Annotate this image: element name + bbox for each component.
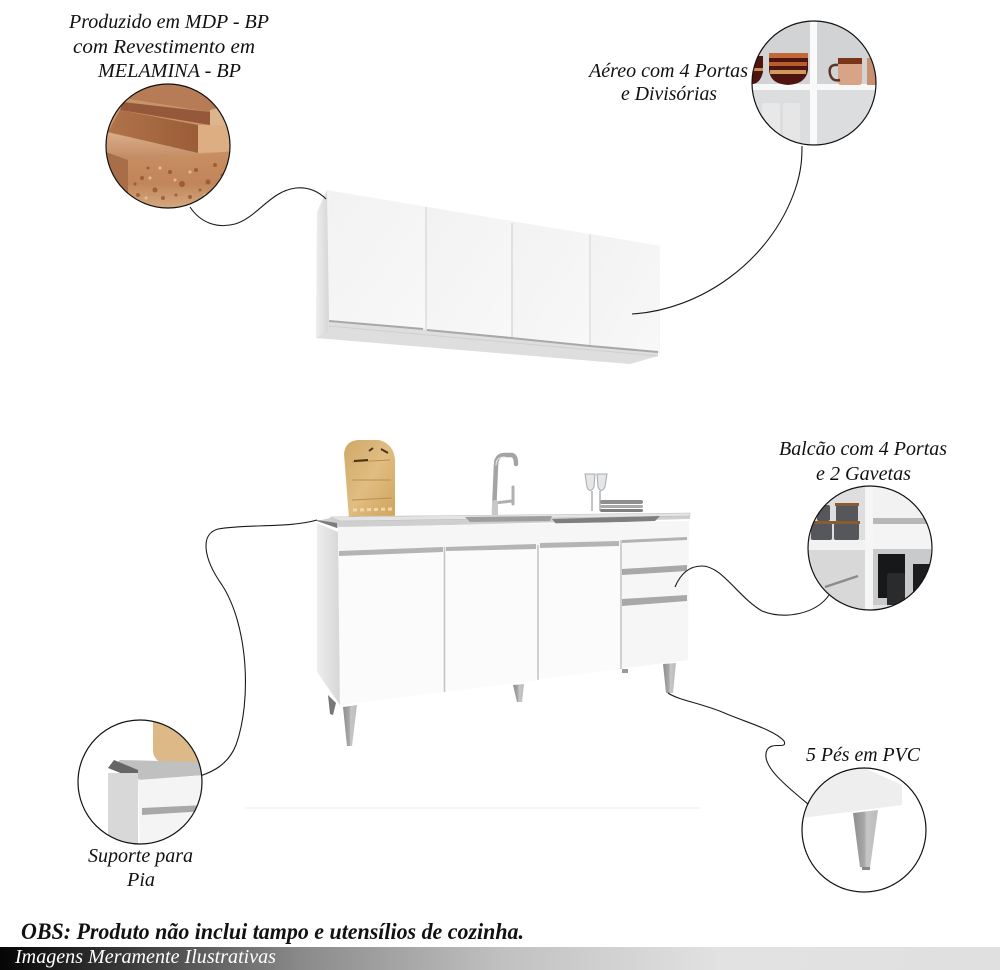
legs xyxy=(328,663,676,746)
label: material xyxy=(68,11,269,82)
base cabinet with sink xyxy=(317,440,690,746)
callout circle: base cabinet interior xyxy=(807,486,932,610)
cutting board xyxy=(344,440,395,518)
wall cabinet xyxy=(316,190,660,364)
wine glasses xyxy=(585,474,607,511)
label: sink support: Suporte para xyxy=(88,845,193,867)
callout circle: PVC foot xyxy=(802,766,926,892)
label: wall cabinet: e Divisórias xyxy=(621,83,717,105)
label: material: MELAMINA - BP xyxy=(97,60,241,82)
label: material: com Revestimento em xyxy=(73,36,255,58)
label: base cabinet xyxy=(779,438,947,485)
label: base cabinet: e 2 Gavetas xyxy=(816,463,911,485)
footer bar xyxy=(0,946,1000,970)
note: product exclusions: OBS: Produto não inclui tampo e utensílios de cozinha. xyxy=(21,919,524,944)
callout circle: wall cabinet interior xyxy=(752,20,876,146)
label: sink support: Pia xyxy=(126,869,155,891)
floor shadow xyxy=(245,807,700,809)
footer bar: Imagens Meramente Ilustrativas xyxy=(14,946,276,968)
connector lines xyxy=(190,146,829,804)
label: wall cabinet xyxy=(587,60,748,105)
callout circle: sink support xyxy=(78,720,205,845)
label: material: Produzido em MDP - BP xyxy=(68,11,269,33)
callout circle: MDP material xyxy=(106,84,232,210)
faucet xyxy=(494,455,516,515)
label: wall cabinet: Aéreo com 4 Portas xyxy=(587,60,748,82)
label: feet: 5 Pés em PVC xyxy=(806,744,921,766)
label: sink support xyxy=(88,845,193,891)
stacked plates xyxy=(600,500,643,512)
label: base cabinet: Balcão com 4 Portas xyxy=(779,438,947,460)
